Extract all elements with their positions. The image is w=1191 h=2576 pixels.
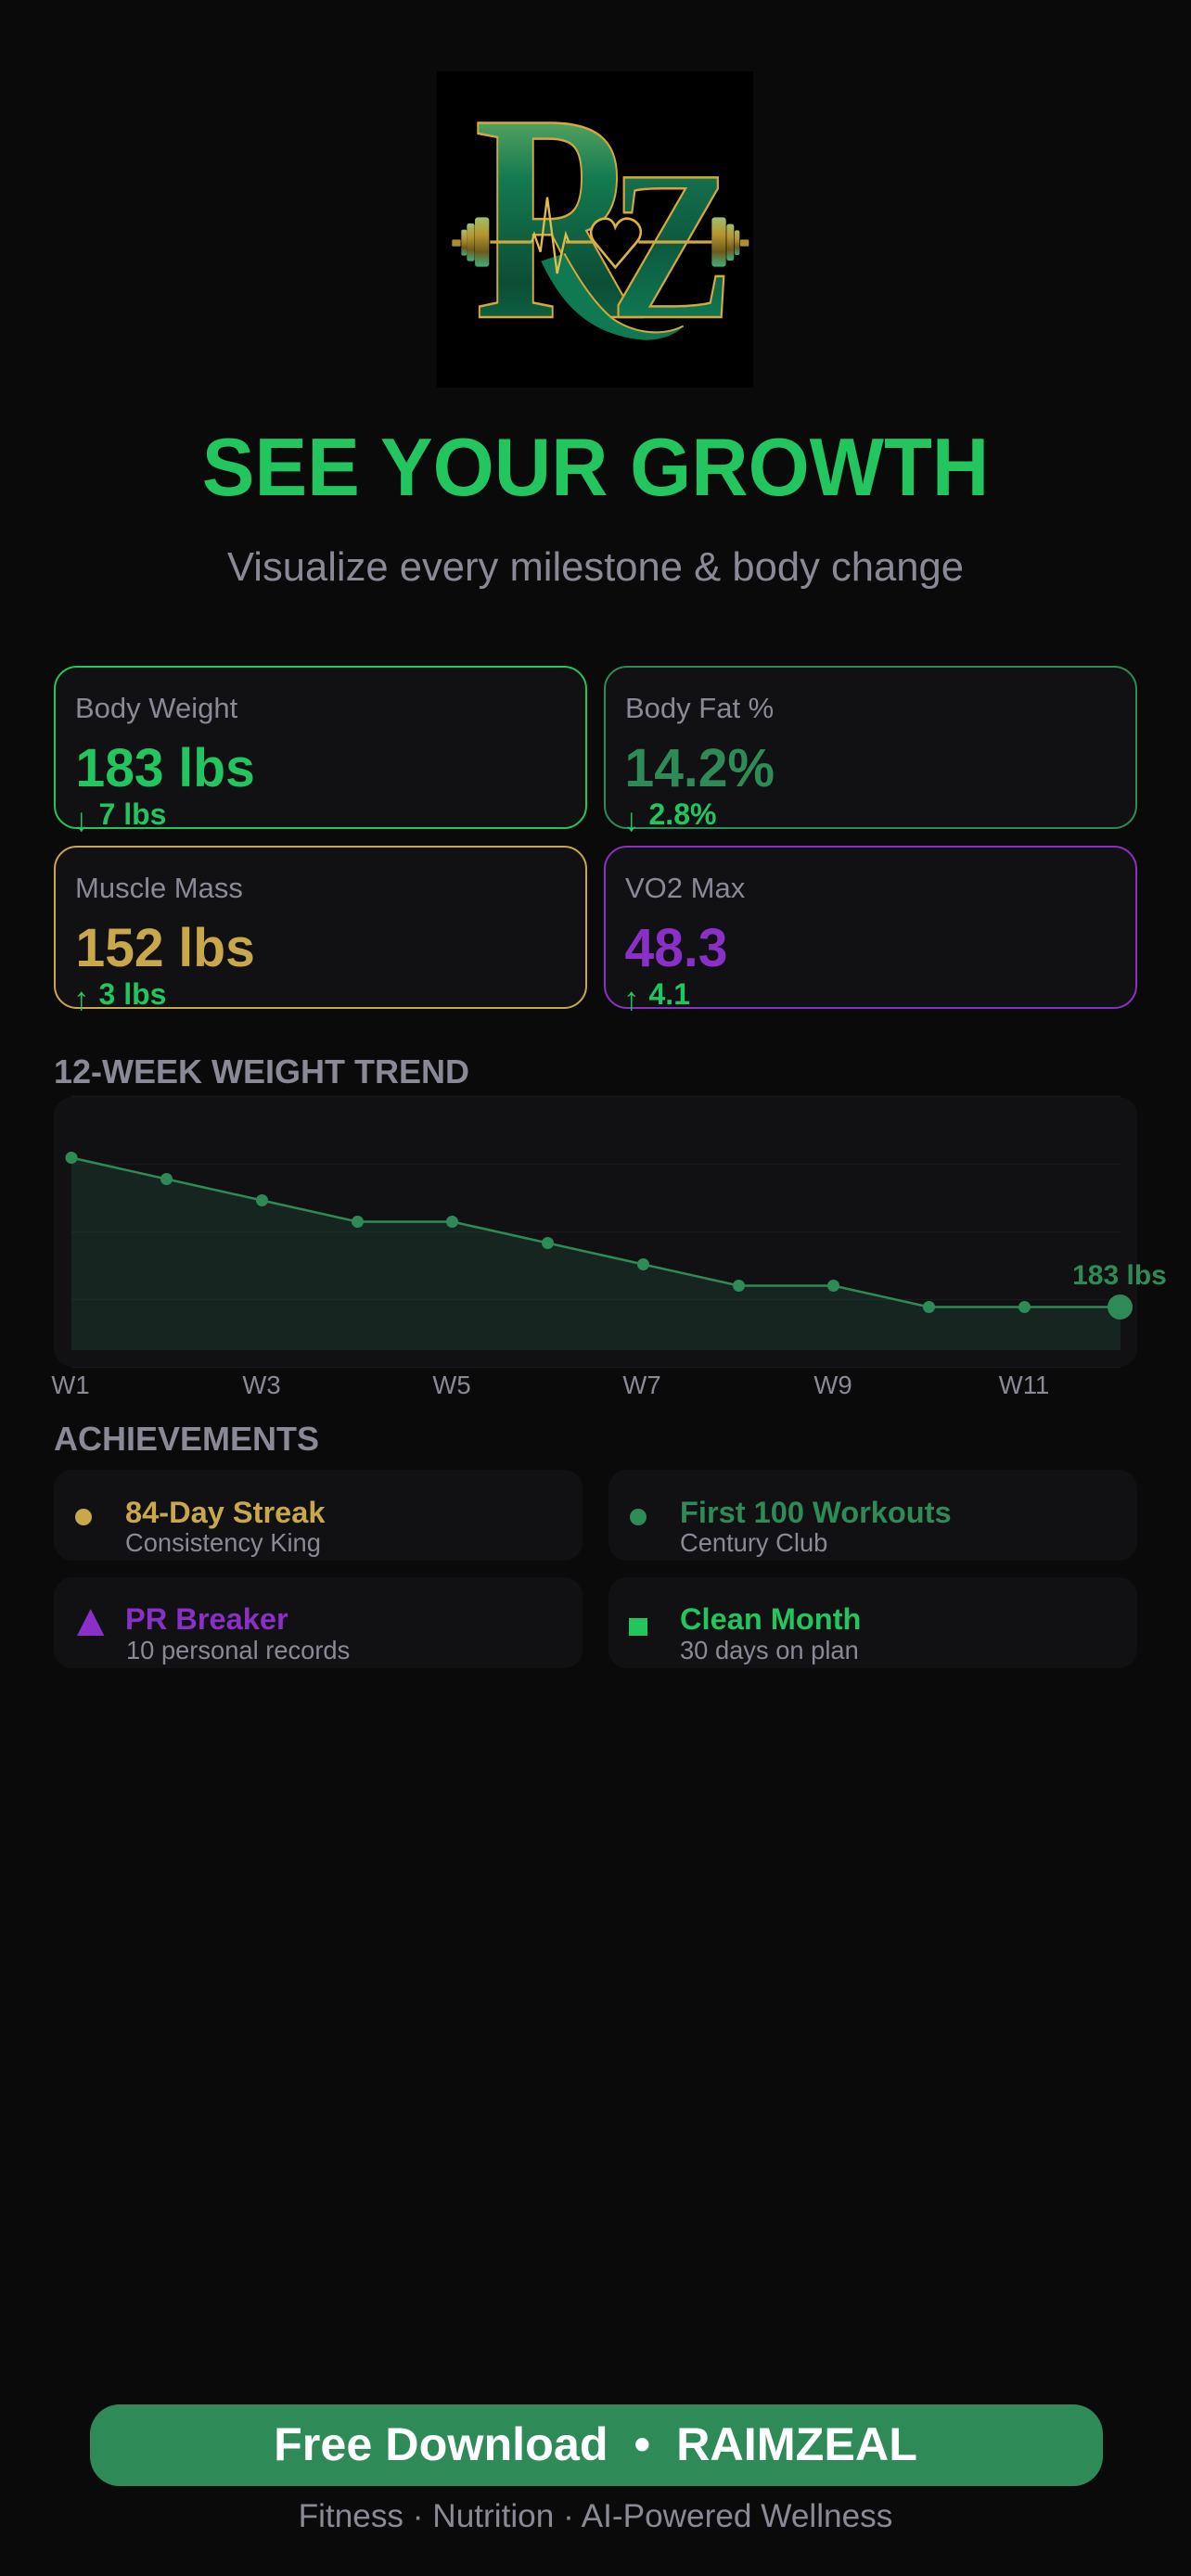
stat card: body weight: Body Weight [75, 692, 238, 724]
stat card: muscle mass: 3 lbs [98, 977, 166, 1011]
stat card: body fat [605, 667, 1136, 838]
stat card: vo2 max: 4.1 [649, 977, 690, 1011]
line chart: 12-week weight trend: 183 lbs [1072, 1260, 1167, 1291]
stat card: muscle mass: 152 lbs [76, 918, 255, 978]
stat card: muscle mass: ↑ [73, 981, 89, 1017]
chart x-axis labels [51, 1371, 1049, 1399]
stat card: muscle mass [55, 847, 586, 1017]
chart x-axis labels: W7 [622, 1371, 661, 1399]
achievement: clean month [608, 1577, 1137, 1668]
achievement: clean month: 30 days on plan [680, 1636, 859, 1664]
title: SEE YOUR GROWTH [202, 423, 989, 513]
achievement: clean month: Clean Month [680, 1601, 861, 1636]
chart x-axis labels: W3 [242, 1371, 281, 1399]
achievement: pr breaker [54, 1577, 583, 1668]
stat card: body weight: 183 lbs [76, 738, 255, 798]
stat card: body fat: Body Fat % [625, 692, 774, 724]
stat card: body weight: 7 lbs [98, 797, 166, 831]
stat card: vo2 max: ↑ [623, 981, 640, 1017]
stat card: vo2 max: VO2 Max [625, 872, 746, 904]
call to action button [90, 2404, 1103, 2486]
achievement: 84-day streak [54, 1470, 583, 1561]
stat card: body weight: ↓ [73, 802, 89, 838]
logo: RZ monogram with barbell and heartbeat: R [474, 54, 644, 382]
chart x-axis labels: W11 [999, 1371, 1049, 1399]
logo: RZ monogram with barbell and heartbeat [437, 54, 753, 388]
achievement: first 100 workouts: Century Club [680, 1528, 827, 1557]
call to action button: Free Download • RAIMZEAL [274, 2417, 917, 2470]
stat card: body fat: 14.2% [625, 738, 775, 798]
achievement: first 100 workouts [608, 1470, 1137, 1561]
line chart: 12-week weight trend [54, 1096, 1167, 1367]
achievement: first 100 workouts: First 100 Workouts [680, 1495, 952, 1529]
chart x-axis labels: W1 [51, 1371, 90, 1399]
achievement: pr breaker: 10 personal records [126, 1636, 350, 1664]
chart x-axis labels: W9 [813, 1371, 852, 1399]
logo: RZ monogram with barbell and heartbeat: Z [609, 127, 733, 363]
footer tagline: Fitness · Nutrition · AI-Powered Wellness [299, 2498, 892, 2534]
achievement: 84-day streak: 84-Day Streak [125, 1495, 326, 1529]
subtitle: Visualize every milestone & body change [227, 545, 964, 590]
achievement: pr breaker: PR Breaker [125, 1601, 288, 1636]
stat card: body weight [55, 667, 586, 838]
achievement: 84-day streak: Consistency King [125, 1528, 321, 1557]
stat card: vo2 max [605, 847, 1136, 1017]
heading: achievements: ACHIEVEMENTS [54, 1420, 319, 1458]
heading: weight trend: 12-WEEK WEIGHT TREND [54, 1052, 469, 1090]
stat card: muscle mass: Muscle Mass [75, 872, 243, 904]
stat card: vo2 max: 48.3 [625, 918, 727, 978]
stat card: body fat: ↓ [623, 802, 640, 838]
stat card: body fat: 2.8% [649, 797, 716, 831]
chart x-axis labels: W5 [432, 1371, 471, 1399]
